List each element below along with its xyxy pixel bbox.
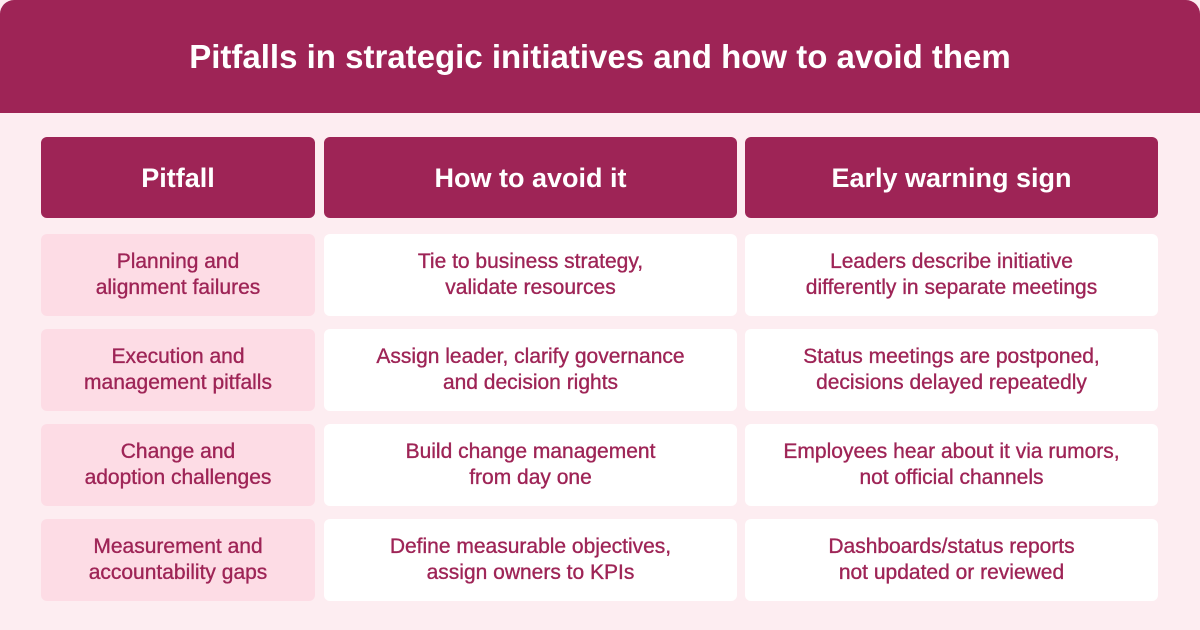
row 2 warning [745,329,1158,411]
row 1 pitfall [41,234,315,316]
title: Pitfalls in strategic initiatives and how to avoid them [189,38,1011,75]
row 3 pitfall [41,424,315,506]
row 3 pitfall: adoption challenges [85,466,271,489]
row 4 warning: Dashboards/status reports [828,535,1075,558]
row 3 warning: Employees hear about it via rumors, [783,440,1120,463]
row 4 warning [745,519,1158,601]
row 4 avoid: Define measurable objectives, [390,535,671,558]
row 2 pitfall [41,329,315,411]
row 2 avoid: Assign leader, clarify governance [376,345,685,368]
row 1 avoid: Tie to business strategy, [418,250,643,273]
row 2 pitfall: management pitfalls [84,371,272,394]
row 1 warning [745,234,1158,316]
row 2 avoid: and decision rights [443,371,618,394]
row 3 pitfall: Change and [121,440,235,463]
row 4 avoid [324,519,737,601]
row 4 pitfall: accountability gaps [89,561,267,584]
header: How to avoid it [324,137,737,218]
header: Early warning sign [745,137,1158,218]
row 4 pitfall [41,519,315,601]
header: How to avoid it: How to avoid it [434,162,626,192]
row 1 pitfall: Planning and [117,250,239,273]
header: Pitfall [41,137,315,218]
table [41,137,1158,601]
row 3 warning [745,424,1158,506]
row 3 avoid: Build change management [406,440,655,463]
header: Early warning sign: Early warning sign [831,162,1072,192]
row 3 avoid [324,424,737,506]
row 2 avoid [324,329,737,411]
row 4 warning: not updated or reviewed [839,561,1064,584]
header: Pitfall: Pitfall [141,162,215,192]
row 4 avoid: assign owners to KPIs [427,561,634,584]
row 1 warning: differently in separate meetings [806,276,1097,299]
row 2 pitfall: Execution and [111,345,245,368]
title [0,0,1200,113]
row 4 pitfall: Measurement and [93,535,263,558]
row 1 warning: Leaders describe initiative [830,250,1073,273]
row 1 avoid: validate resources [445,276,616,299]
row 2 warning: Status meetings are postponed, [803,345,1100,368]
row 3 avoid: from day one [469,466,592,489]
row 1 avoid [324,234,737,316]
row 2 warning: decisions delayed repeatedly [816,371,1087,394]
row 1 pitfall: alignment failures [96,276,260,299]
row 3 warning: not official channels [859,466,1044,489]
